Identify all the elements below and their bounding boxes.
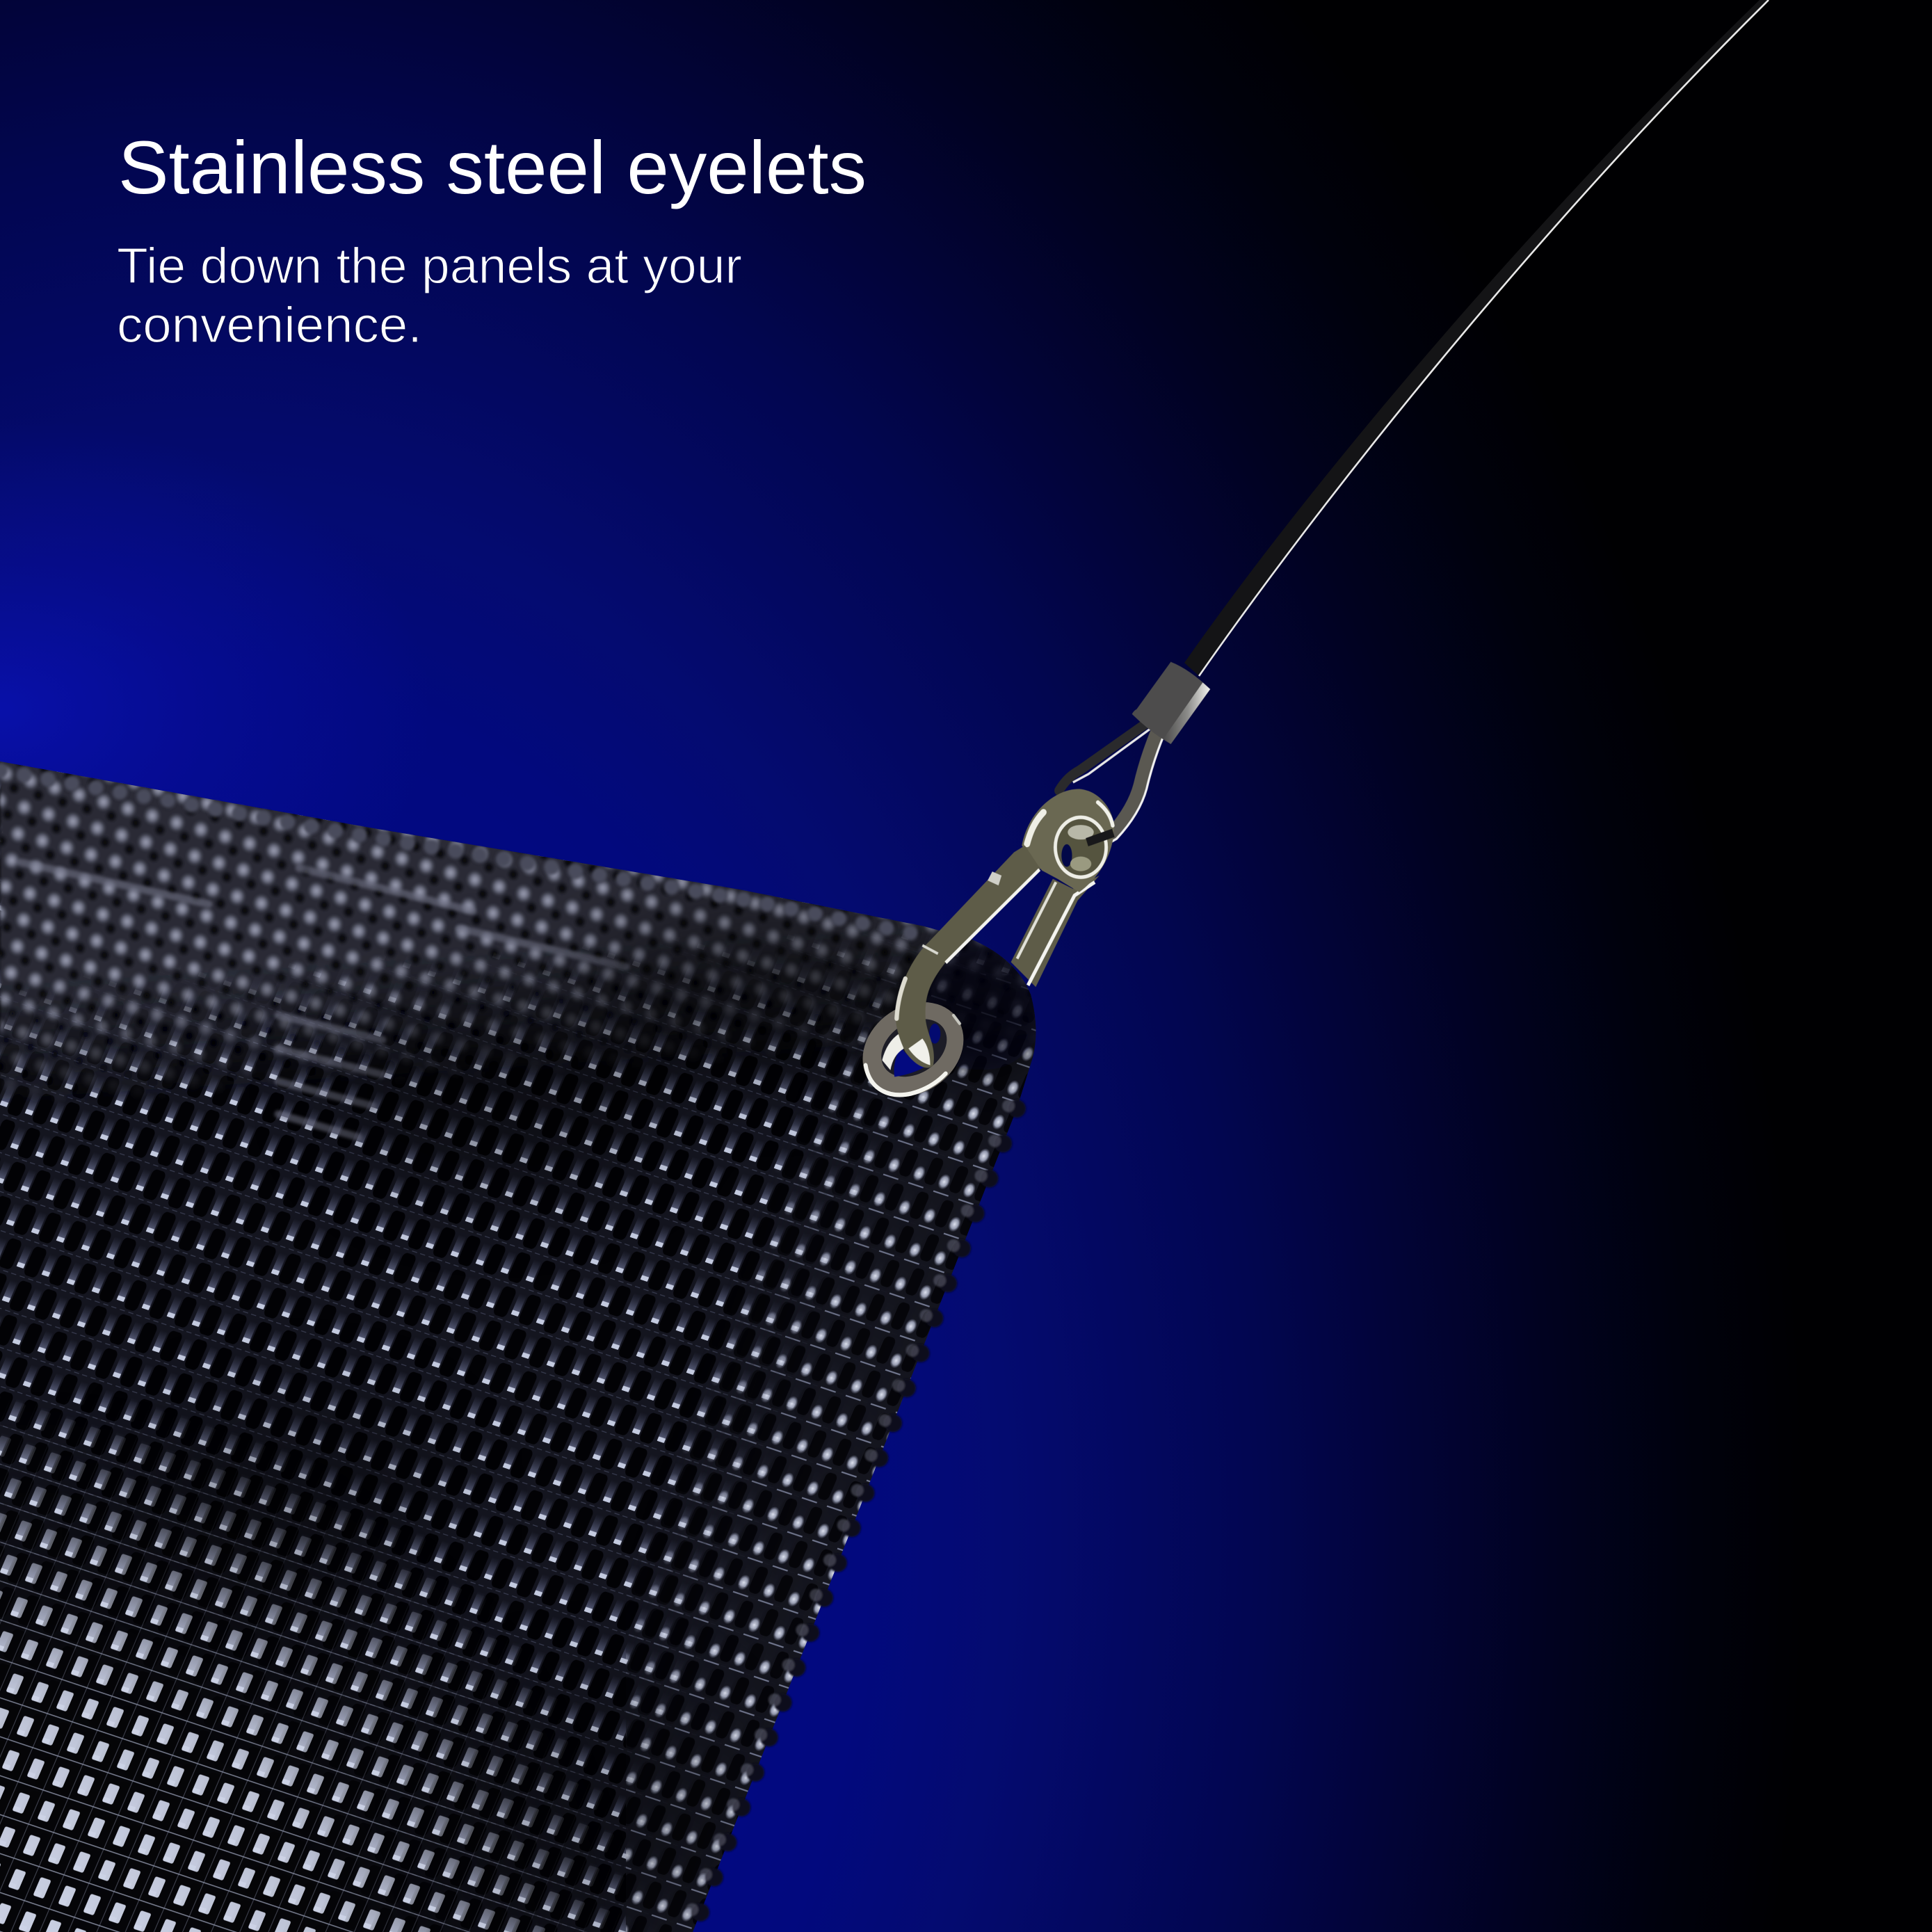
description text block — [117, 239, 742, 353]
mesh texture: bright squares at lower left — [0, 1405, 625, 1932]
steel cable highlight — [1199, 0, 1769, 676]
wire loop: right strand — [1092, 732, 1164, 850]
dark corner tab behind eyelet — [915, 932, 1047, 1071]
carabiner hook arm — [896, 846, 1040, 1068]
title: Stainless steel eyelets — [118, 125, 867, 209]
description text block: convenience. — [117, 298, 422, 353]
stainless steel eyelet — [847, 984, 979, 1115]
description text block: Tie down the panels at your — [117, 239, 742, 294]
carabiner lower arm — [1011, 876, 1100, 987]
shaded patches across the mesh — [139, 911, 946, 1932]
blue glow on left edge — [0, 348, 487, 1043]
steel cable sleeve — [1184, 0, 1769, 676]
wire loop: left strand — [1059, 723, 1152, 791]
seam streaks on the upper mesh — [21, 862, 626, 1137]
mesh texture: mid dark zone — [0, 758, 1043, 1932]
carabiner head — [1022, 789, 1114, 892]
scalloped right hem — [684, 1106, 1017, 1932]
bumpy top hem — [0, 771, 924, 935]
mesh texture: right hem with dots — [626, 974, 1043, 1932]
crimp sleeve — [1132, 662, 1210, 744]
mesh texture: soft out-of-focus upper zone — [0, 762, 1035, 1104]
icon: carabiner, wire loop and eyelet hardware — [847, 662, 1210, 1115]
panel: black mesh banner — [0, 758, 1047, 1932]
